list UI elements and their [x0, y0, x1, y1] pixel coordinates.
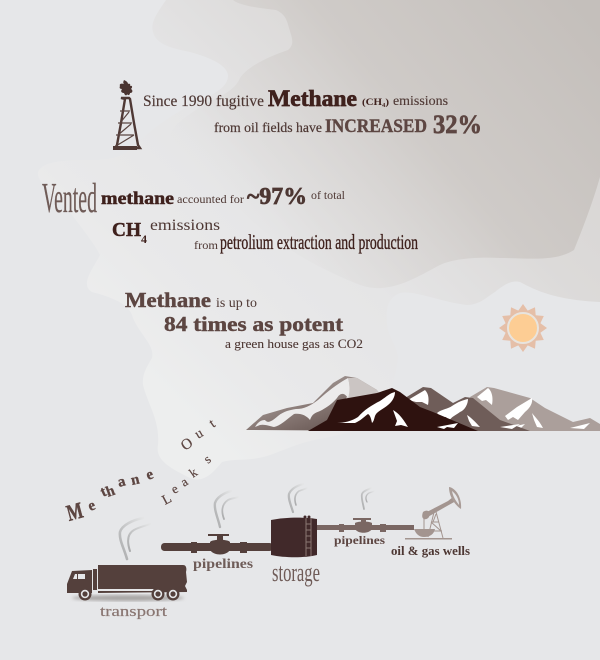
- curved label: methane leaks out: u: [192, 426, 206, 442]
- icon: tanker truck: [67, 565, 187, 601]
- icon: storage tank: [271, 516, 317, 557]
- label: oil and gas wells: oil & gas wells: [391, 543, 470, 558]
- text block: vented methane: 4: [141, 232, 147, 246]
- curved label: methane leaks out: a: [116, 473, 128, 491]
- smoke wisps: [120, 484, 374, 559]
- text block: vented methane: from: [194, 240, 218, 252]
- pipeline right: [317, 518, 414, 533]
- text block: vented methane: accounted for: [177, 194, 244, 206]
- text block: 84 times as potent: [125, 288, 363, 351]
- curved label: methane leaks out: L: [160, 491, 174, 509]
- text block: vented methane: petrolium extraction and production: [220, 230, 418, 254]
- text block: vented methane: [42, 176, 418, 254]
- curved label: methane leaks out: h: [104, 483, 118, 501]
- curved label: methane leaks out: M: [64, 497, 86, 526]
- curved label: methane leaks out: e: [168, 481, 181, 497]
- curved label: methane leaks out: e: [144, 466, 156, 484]
- text block: vented methane: emissions: [150, 217, 220, 234]
- curved label: methane leaks out: n: [130, 471, 142, 489]
- text block: vented methane: CH: [112, 219, 141, 241]
- text block: since 1990: Since 1990 fugitive: [143, 93, 264, 110]
- label: pipelines right: pipelines: [334, 533, 385, 547]
- text block: 84 times as potent: is up to: [216, 295, 257, 310]
- text block: since 1990: Methane: [268, 86, 357, 111]
- icon: oil derrick: [113, 80, 140, 150]
- label: pipelines left: pipelines: [193, 556, 253, 571]
- darker cloud layer: [168, 0, 600, 288]
- text block: since 1990: emissions: [393, 93, 448, 108]
- label: transport: transport: [100, 604, 168, 620]
- text block: since 1990: from oil fields have: [214, 121, 322, 136]
- text block: since 1990: 32%: [433, 110, 482, 139]
- text block: 84 times as potent: a green house gas as CO2: [225, 336, 363, 351]
- pipeline left: [161, 534, 273, 554]
- smoke cloud: [38, 0, 600, 479]
- curved label: methane leaks out: t: [98, 484, 109, 501]
- text block: vented methane: Vented: [42, 176, 97, 222]
- text block: since 1990: (CH₄): [362, 97, 389, 108]
- icon: pump jack: [405, 487, 461, 540]
- mountains: [246, 376, 600, 431]
- text block: 84 times as potent: Methane: [125, 288, 211, 312]
- text block: vented methane: of total: [311, 190, 345, 202]
- curved label: methane leaks out: [64, 417, 219, 526]
- text block: 84 times as potent: 84 times as potent: [164, 312, 343, 336]
- text block: vented methane: ~97%: [247, 184, 307, 210]
- curved label: methane leaks out: s: [200, 452, 214, 466]
- icon: sun: [499, 304, 547, 352]
- curved label: methane leaks out: t: [207, 417, 219, 431]
- text block: since 1990: INCREASED: [325, 116, 427, 137]
- curved label: methane leaks out: O: [178, 435, 196, 454]
- curved label: methane leaks out: a: [178, 474, 191, 490]
- label: storage: storage: [272, 558, 320, 587]
- text block: vented methane: methane: [101, 188, 174, 208]
- text block: since 1990: [143, 86, 482, 139]
- curved label: methane leaks out: k: [186, 464, 200, 480]
- curved label: methane leaks out: e: [86, 497, 98, 515]
